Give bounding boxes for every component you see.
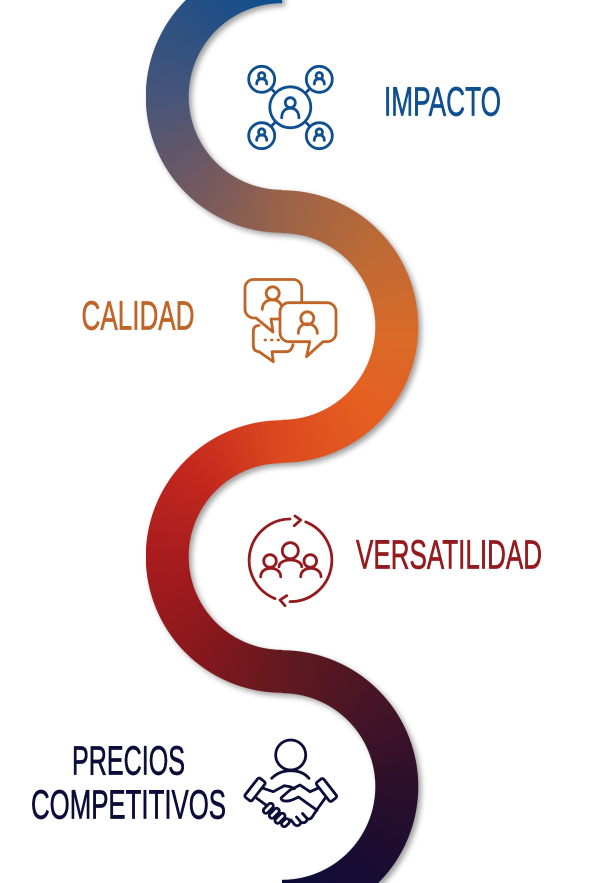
label: PRECIOS COMPETITIVOS: PRECIOS <box>72 738 185 784</box>
ribbon arc 1: blue to brown <box>146 0 282 233</box>
label: IMPACTO: IMPACTO <box>384 78 501 124</box>
icon: person and handshake <box>244 740 337 828</box>
label: PRECIOS COMPETITIVOS: COMPETITIVOS <box>31 782 226 828</box>
ribbon arc 3: red to maroon <box>146 420 282 693</box>
label: PRECIOS COMPETITIVOS <box>31 738 226 828</box>
icon: people in circular arrows <box>249 516 332 606</box>
icon: speech bubbles with people <box>245 280 336 362</box>
ribbon arc 2: brown to orange <box>282 190 418 463</box>
label: CALIDAD: CALIDAD <box>82 292 194 338</box>
icon: connected people network <box>249 66 332 149</box>
curved gradient ribbon <box>145 0 425 883</box>
ribbon arc 4: maroon to navy <box>282 650 418 883</box>
